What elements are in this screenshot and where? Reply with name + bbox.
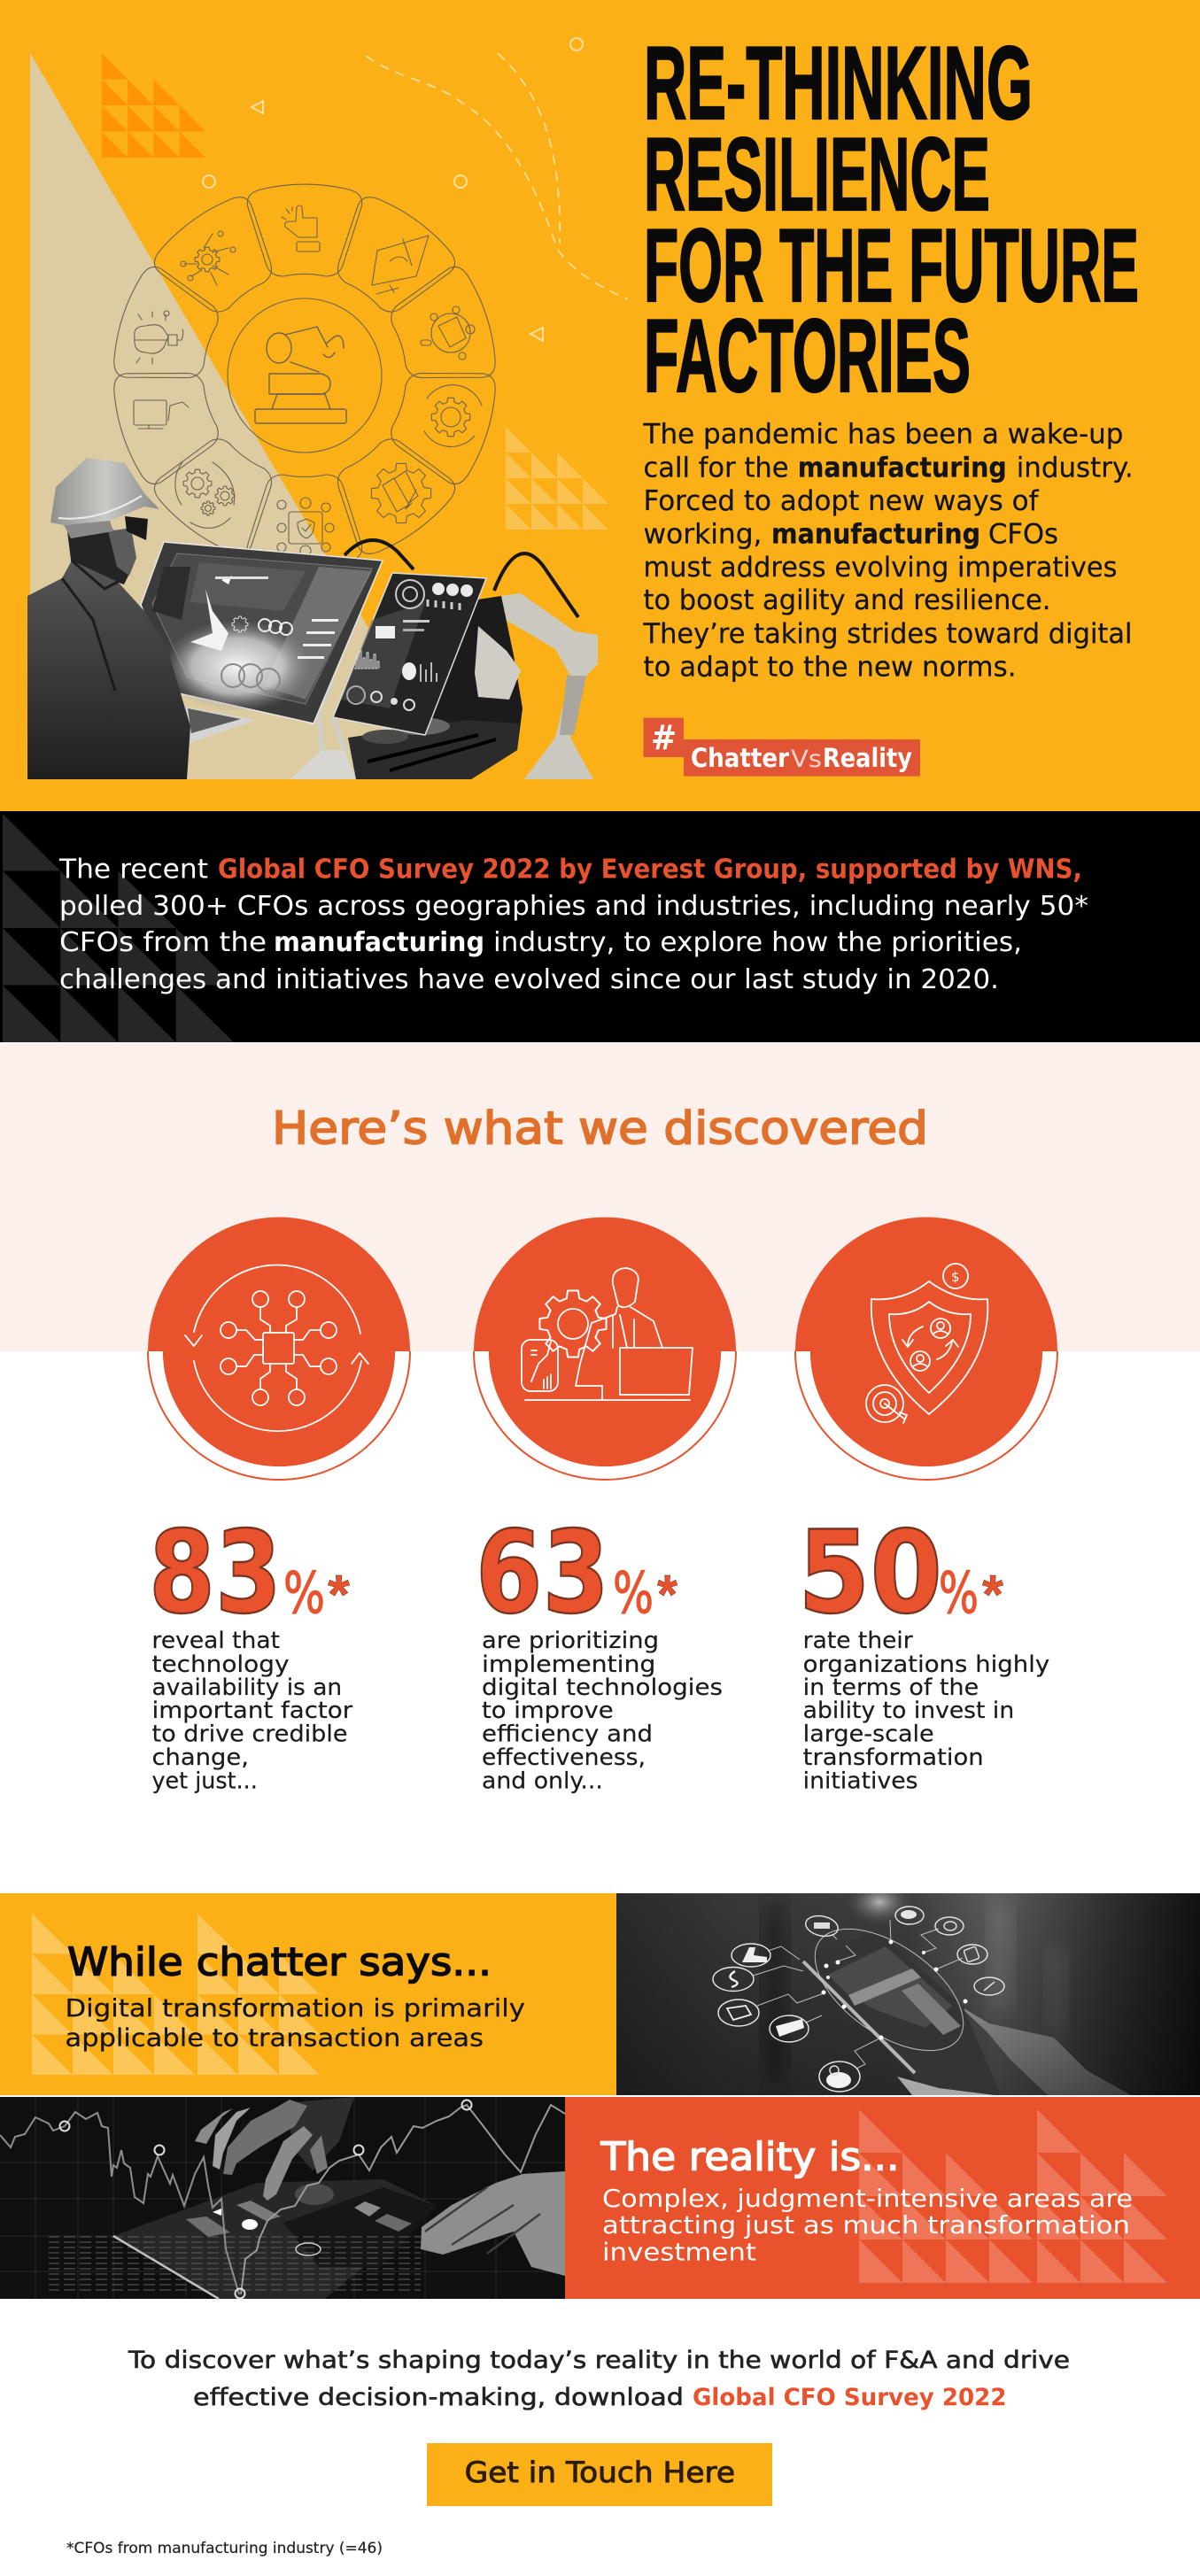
stat text 3: large-scale xyxy=(803,1721,934,1748)
robot arm photo xyxy=(290,540,598,779)
stat text 2: efficiency and xyxy=(482,1721,653,1748)
intro paragraph: They’re taking strides toward digital xyxy=(643,618,1132,650)
intro paragraph: Forced to adopt new ways of xyxy=(643,485,1040,517)
stat text 1: availability is an xyxy=(152,1675,342,1701)
stat text 3: initiatives xyxy=(803,1768,917,1795)
stat text 2: are prioritizing xyxy=(482,1628,659,1654)
survey text: Global CFO Survey 2022 by Everest Group, supported by WNS, xyxy=(218,855,1082,886)
survey text: CFOs from the xyxy=(59,927,267,958)
circle badge 1 xyxy=(148,1218,410,1480)
stat text 2: digital technologies xyxy=(482,1675,723,1701)
call to action text: Global CFO Survey 2022 xyxy=(693,2384,1006,2411)
reality text: attracting just as much transformation xyxy=(602,2210,1130,2239)
reality text: investment xyxy=(602,2238,756,2267)
stat 83%: % xyxy=(283,1561,325,1627)
intro paragraph: call for the xyxy=(643,452,788,483)
data overlay panel xyxy=(333,573,486,735)
intro paragraph: must address evolving imperatives xyxy=(643,552,1118,584)
call to action text: To discover what’s shaping today’s reality in the world of F&A and drive xyxy=(128,2347,1070,2374)
footnote: *CFOs from manufacturing industry (=46) xyxy=(66,2540,383,2557)
icon: central robot arm xyxy=(255,327,346,423)
stat text 2: effectiveness, xyxy=(482,1744,646,1771)
beige triangle backdrop xyxy=(30,53,458,779)
button xyxy=(427,2443,772,2506)
stat text 1: important factor xyxy=(152,1698,352,1724)
intro paragraph: CFOs xyxy=(988,519,1058,551)
hashtag badge: Chatter xyxy=(691,743,790,773)
title xyxy=(644,25,1139,414)
icon: gear with documents xyxy=(371,463,431,523)
stat text 3: rate their xyxy=(803,1628,913,1654)
survey text: challenges and initiatives have evolved since our last study in 2020. xyxy=(59,964,999,995)
stat text 3: in terms of the xyxy=(803,1675,979,1701)
stat text 1 xyxy=(152,1628,352,1795)
intro paragraph: to boost agility and resilience. xyxy=(643,584,1050,616)
stat text 3: organizations highly xyxy=(803,1652,1049,1678)
icon: monitor and robot tool xyxy=(134,400,189,429)
panel: hero background xyxy=(0,0,1200,811)
stat 50%: 50 xyxy=(798,1507,942,1639)
icon: executive with gear and laptop xyxy=(522,1268,693,1400)
hashtag badge: Reality xyxy=(823,743,912,773)
survey text xyxy=(58,855,1088,995)
intro paragraph: manufacturing xyxy=(798,452,1007,483)
chatter text: Digital transformation is primarily xyxy=(66,1993,525,2023)
reality text xyxy=(602,2184,1133,2267)
chatter heading: While chatter says... xyxy=(67,1940,492,1985)
icon: three gears xyxy=(175,462,235,528)
stat text 1: to drive credible xyxy=(152,1721,347,1748)
intro paragraph: to adapt to the new norms. xyxy=(643,652,1017,684)
icon: shield with people and target xyxy=(866,1264,987,1423)
stat text 3: transformation xyxy=(803,1744,984,1771)
intro paragraph xyxy=(642,419,1134,684)
stat 50%: * xyxy=(982,1565,1004,1626)
survey text: manufacturing xyxy=(274,927,484,958)
stat text 3: ability to invest in xyxy=(803,1698,1014,1724)
reality heading: The reality is... xyxy=(600,2135,900,2180)
stat text 1: technology xyxy=(152,1652,289,1678)
panel: reality xyxy=(565,2097,1200,2299)
stat 50%: % xyxy=(939,1561,979,1627)
panel: survey intro band xyxy=(0,811,1200,1042)
section heading: Here’s what we discovered xyxy=(272,1103,928,1156)
survey text: polled 300+ CFOs across geographies and industries, including nearly 50* xyxy=(59,891,1088,922)
control touchscreen xyxy=(141,542,383,744)
panel: chatter xyxy=(0,1893,616,2095)
chatter text: applicable to transaction areas xyxy=(66,2023,484,2053)
reality text: Complex, judgment-intensive areas are xyxy=(602,2184,1133,2213)
stat text 3 xyxy=(803,1628,1049,1795)
icon: shield in node grid xyxy=(277,498,334,556)
orange triangle pattern xyxy=(102,53,205,158)
icon: pointing hand xyxy=(282,205,320,251)
stat text 1: reveal that xyxy=(152,1628,280,1654)
photo: hands with tablet and market chart xyxy=(0,2097,565,2299)
icon: gear with rotation arrows xyxy=(424,385,482,446)
circle badge 2 xyxy=(474,1218,736,1480)
stat text 2: and only... xyxy=(482,1768,603,1795)
call to action text: effective decision-making, download xyxy=(193,2384,684,2411)
call to action text xyxy=(128,2347,1070,2411)
stat text 2: implementing xyxy=(482,1652,655,1678)
stat text 1: change, xyxy=(152,1744,249,1771)
wheel of outlined segments xyxy=(105,184,504,567)
stat 83%: 83 xyxy=(149,1507,282,1639)
icon: gear with circuit nodes xyxy=(181,231,236,285)
coin dollar sign: $ xyxy=(951,1269,960,1285)
survey text: The recent xyxy=(58,855,208,886)
stat 83%: * xyxy=(328,1565,351,1626)
stat text 1: yet just... xyxy=(152,1768,258,1795)
intro paragraph: working, xyxy=(643,519,762,551)
hashtag badge xyxy=(643,718,920,777)
hashtag badge: # xyxy=(651,718,677,757)
icon: chip with rotating arrows xyxy=(185,1265,368,1431)
icon: brain plug xyxy=(135,311,183,364)
photo: hand holding phone with icons xyxy=(616,1879,1200,2095)
survey text: industry, to explore how the priorities, xyxy=(493,927,1022,958)
decorative dashed curves and small shapes xyxy=(203,38,628,341)
intro paragraph: industry. xyxy=(1017,452,1134,483)
circle badge 3 xyxy=(795,1218,1057,1480)
intro paragraph: The pandemic has been a wake-up xyxy=(642,419,1123,451)
button: Get in Touch Here xyxy=(465,2456,735,2489)
stat 63%: 63 xyxy=(476,1507,609,1639)
chatter text xyxy=(66,1993,525,2053)
icon: magnifier with nodes xyxy=(421,306,475,360)
hashtag badge: Vs xyxy=(791,746,822,773)
dark triangle pattern xyxy=(3,814,234,1042)
light triangle pattern xyxy=(506,427,608,530)
intro paragraph: manufacturing xyxy=(771,519,980,551)
stat 63%: % xyxy=(613,1561,654,1627)
panel: findings cream background xyxy=(0,1043,1200,1351)
stat text 2 xyxy=(482,1628,723,1795)
icon: monitor with circuit xyxy=(372,236,429,294)
stat 63%: * xyxy=(657,1565,678,1626)
worker in hard hat xyxy=(27,458,190,779)
stat text 2: to improve xyxy=(482,1698,614,1724)
